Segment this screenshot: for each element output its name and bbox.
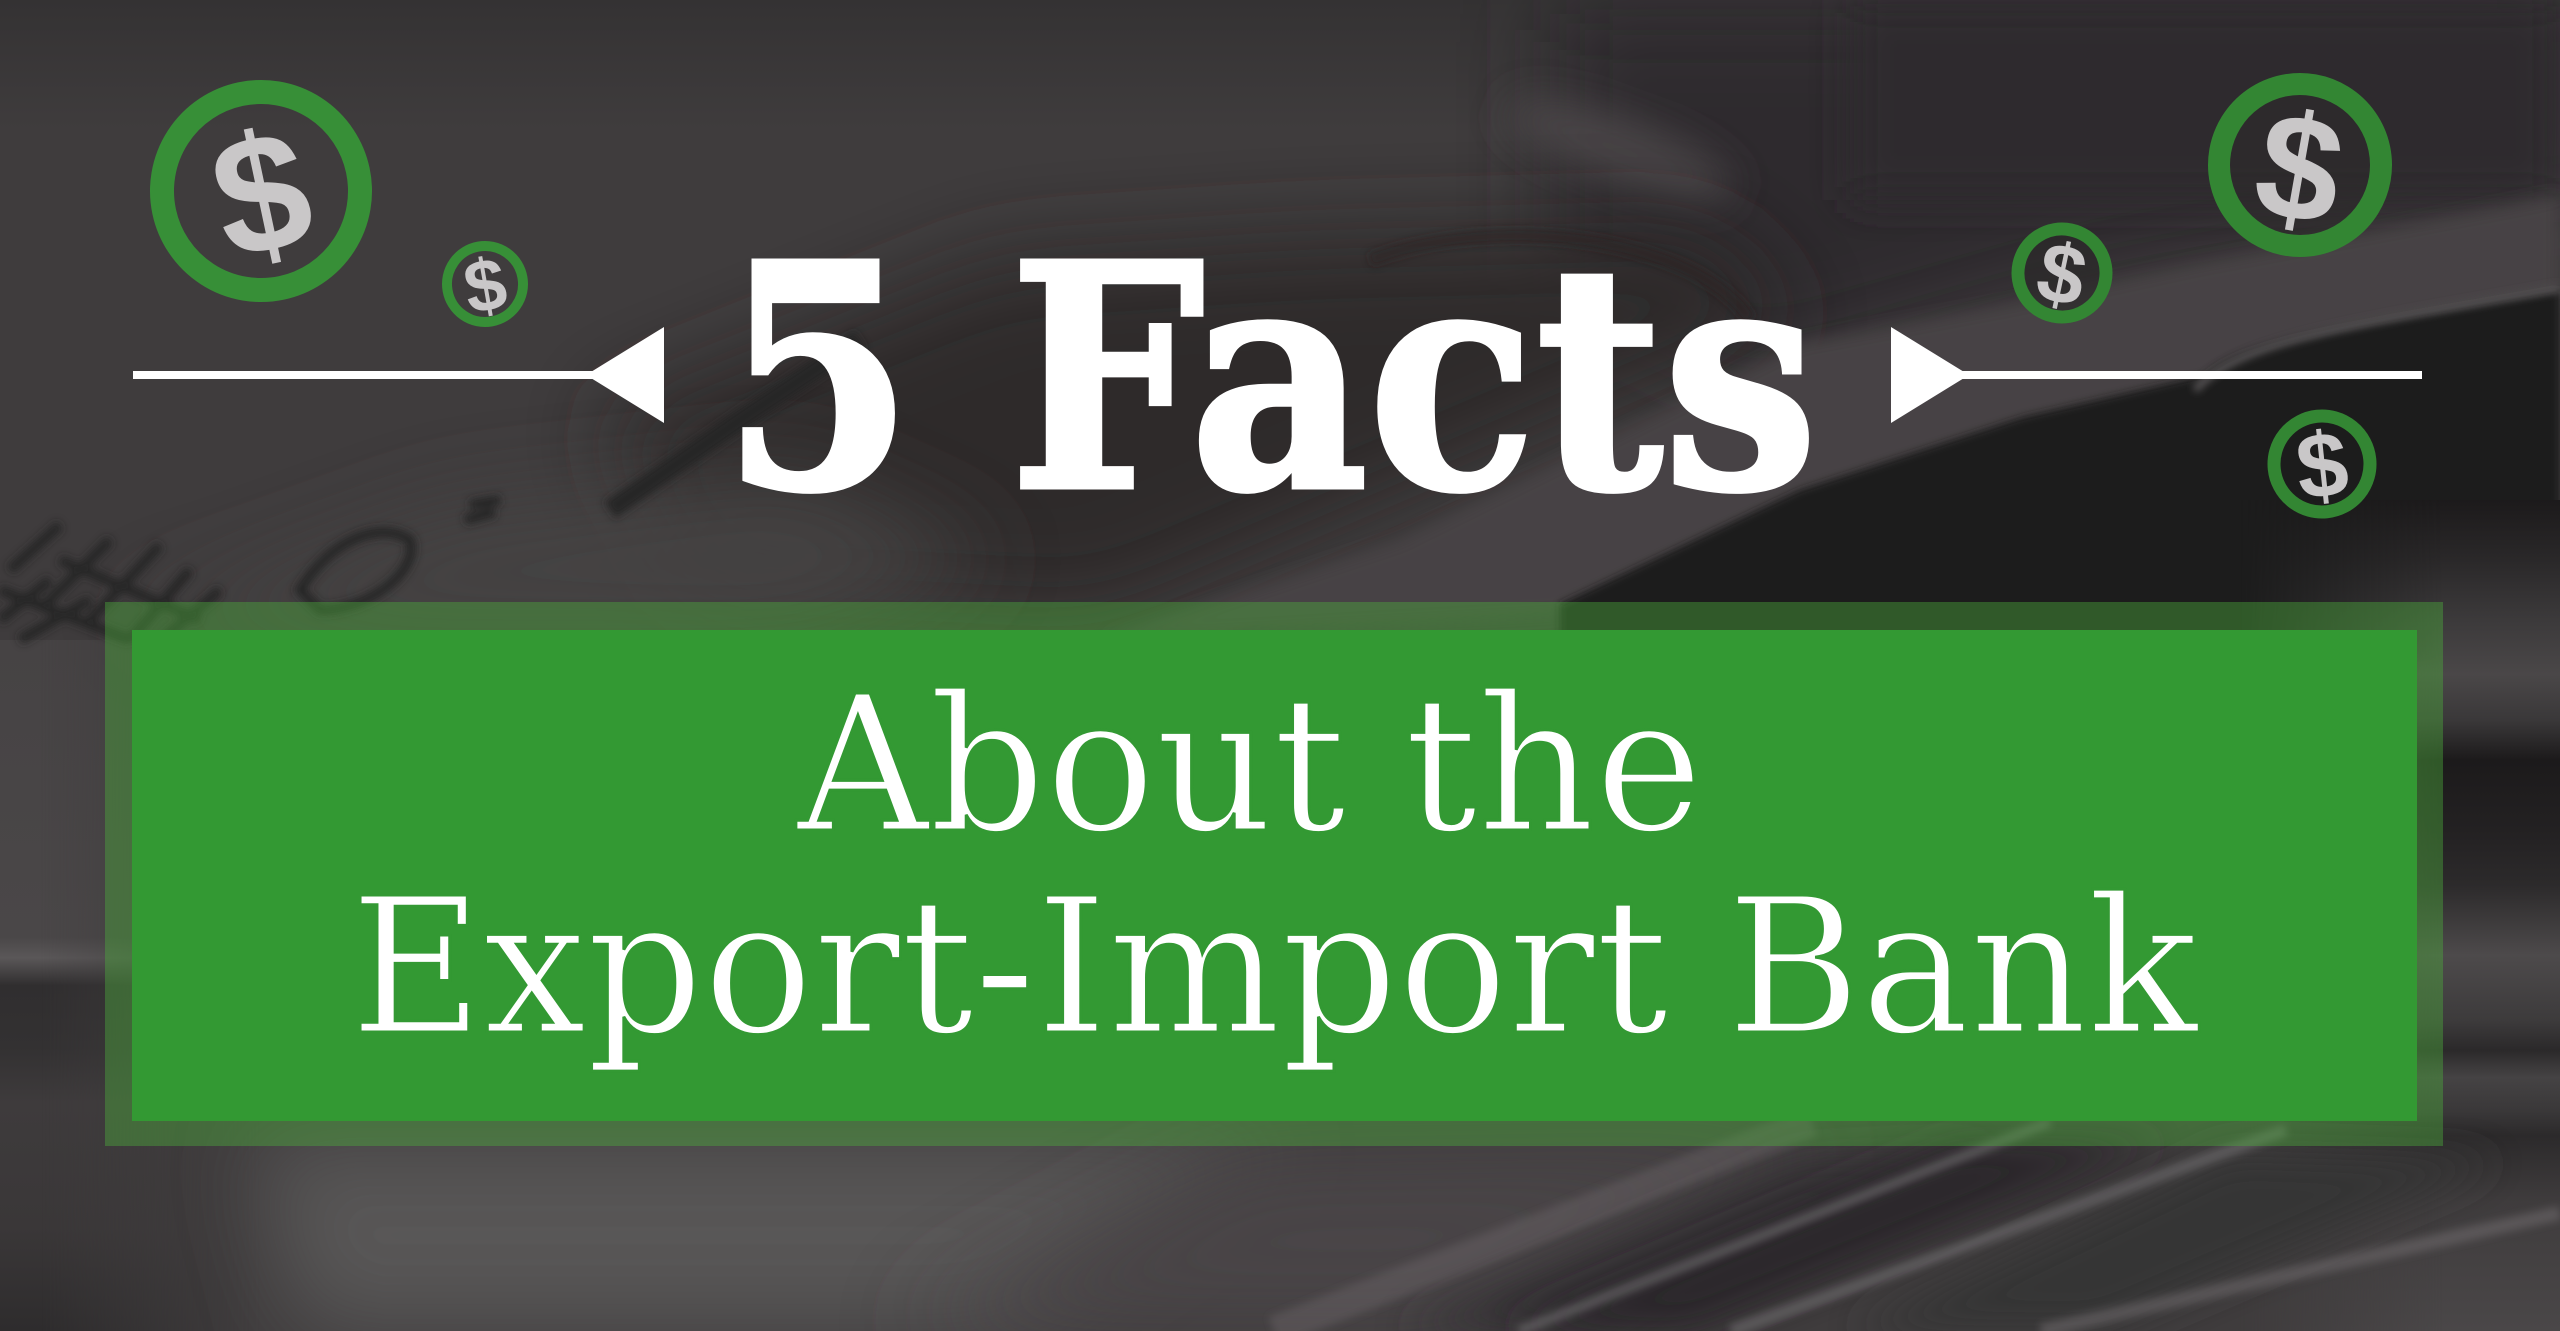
subtitle line: About the: About the <box>795 656 1703 875</box>
icon: medium dollar coin, lower right <box>2269 410 2375 522</box>
icon: medium dollar coin, lower right: $ <box>2291 413 2353 519</box>
icon: small dollar coin, left: $ <box>458 241 513 330</box>
icon: small dollar coin, right: $ <box>2029 223 2094 325</box>
right arrow with rule <box>1891 327 2422 423</box>
left arrow with rule <box>133 327 664 423</box>
panel: green title banner <box>105 602 2443 1146</box>
subtitle line: Export-Import Bank: Export-Import Bank <box>350 858 2200 1077</box>
icon: large dollar coin, top left: $ <box>196 92 327 296</box>
icon: small dollar coin, right <box>2009 219 2115 329</box>
icon: large dollar coin, top left <box>144 74 378 308</box>
icon: large dollar coin, top right <box>2205 71 2394 265</box>
icon: large dollar coin, top right: $ <box>2244 78 2355 258</box>
heading: 5 Facts: 5 Facts <box>722 197 1818 561</box>
icon: small dollar coin, left <box>441 238 530 333</box>
